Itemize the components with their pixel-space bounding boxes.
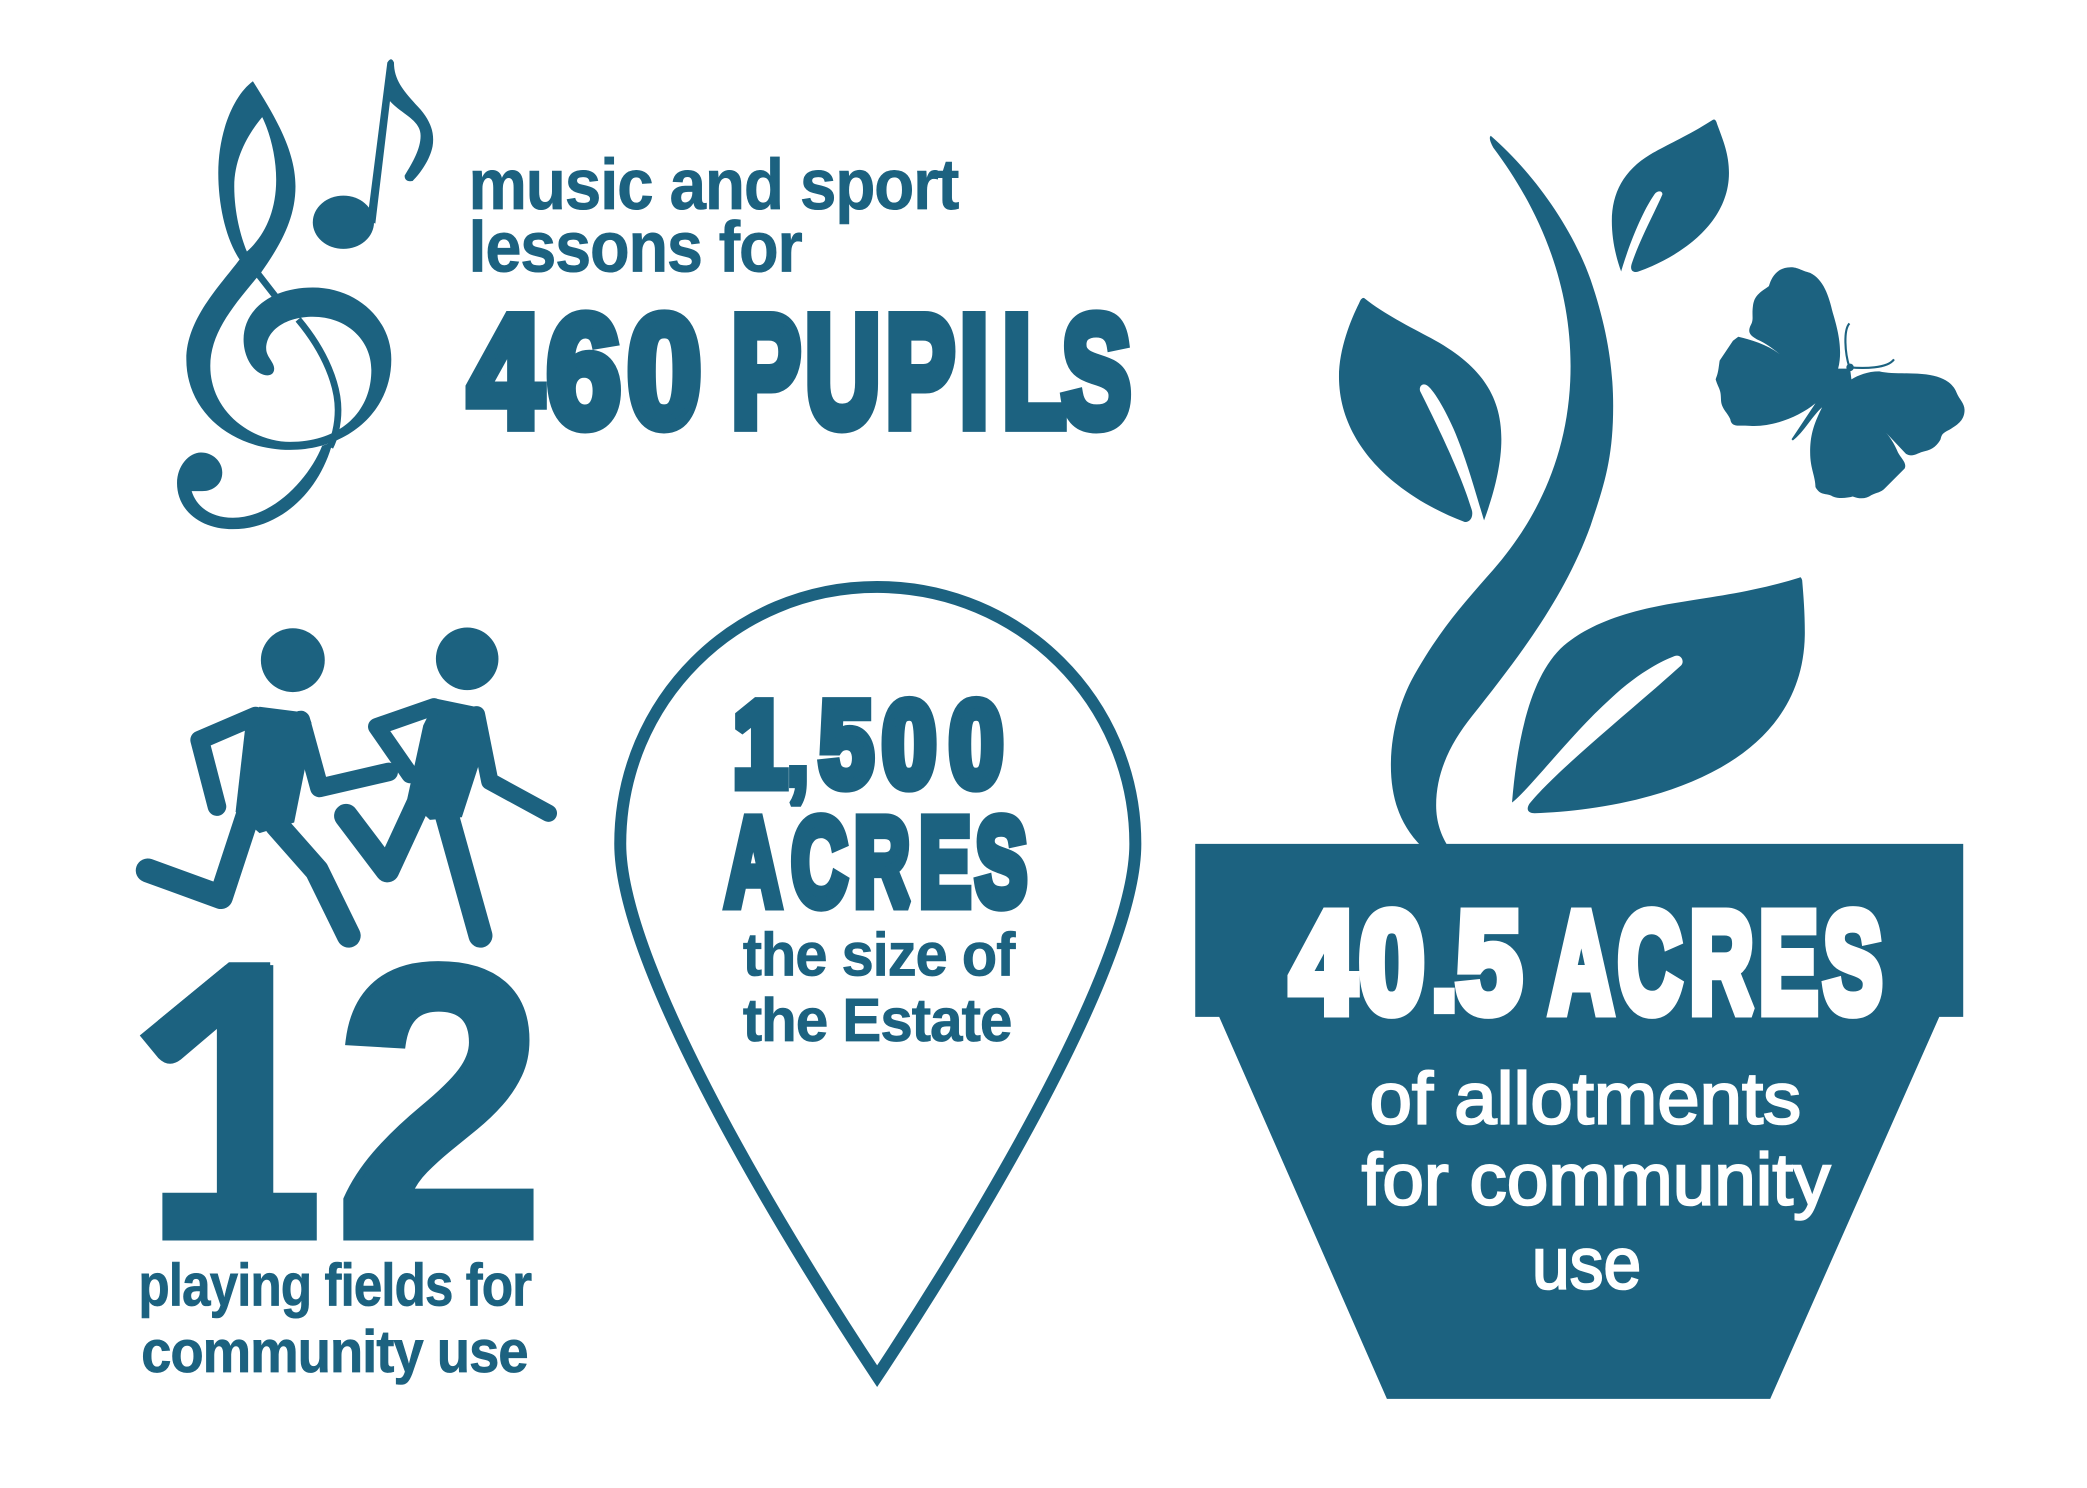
stat: 12: 2: [334, 885, 545, 1319]
text: playing fields for community use: [138, 1251, 532, 1386]
stat: 12: [133, 885, 545, 1319]
icon: butterfly: [1716, 267, 1965, 498]
stat: 1,500 acres: [726, 679, 1027, 931]
stat: 12: 1: [137, 885, 336, 1319]
text: playing fields for community use: playing fields for: [138, 1251, 532, 1319]
stat: 460 pupils: PUPILS: [731, 283, 1131, 461]
icon: map pin outline: [620, 587, 1135, 1376]
icon: top leaf: [1612, 120, 1729, 272]
panel: allotments: [1195, 120, 1965, 1399]
stat: 460 pupils: 460: [469, 283, 701, 461]
icon: left leaf: [1339, 298, 1501, 522]
icon: plant pot: [1195, 844, 1963, 1399]
icon: bottom leaf: [1512, 577, 1805, 813]
text: the size of the Estate: the Estate: [743, 985, 1012, 1054]
panel: music and sport lessons: [177, 59, 1131, 529]
text: of allotments for community use: of allotments: [1370, 1057, 1801, 1139]
text: of allotments for community use: for community: [1362, 1138, 1831, 1220]
text: of allotments for community use: use: [1532, 1222, 1641, 1304]
text: of allotments for community use: [1362, 1057, 1831, 1304]
stat: 40.5 acres: 40.5: [1291, 882, 1521, 1042]
text: playing fields for community use: community use: [141, 1318, 528, 1386]
icon: two runners: [148, 628, 548, 936]
icon: treble clef: [177, 81, 391, 529]
text: music and sport lessons for: music and sport: [469, 145, 959, 225]
stat: 1,500 acres: 1,500: [733, 679, 1003, 812]
panel: estate map pin: [620, 587, 1135, 1376]
stat: 460 pupils: [469, 283, 1131, 461]
icon: plant stem: [1391, 136, 1613, 846]
stat: 40.5 acres: ACRES: [1549, 882, 1882, 1042]
text: music and sport lessons for: lessons for: [469, 208, 803, 287]
stat: 1,500 acres: ACRES: [726, 793, 1027, 931]
text: music and sport lessons for: [469, 145, 959, 287]
text: the size of the Estate: the size of: [743, 920, 1016, 989]
icon: music note: [313, 59, 433, 249]
panel: playing fields: [133, 628, 548, 1386]
text: the size of the Estate: [743, 920, 1016, 1054]
stat: 40.5 acres: [1291, 882, 1882, 1042]
